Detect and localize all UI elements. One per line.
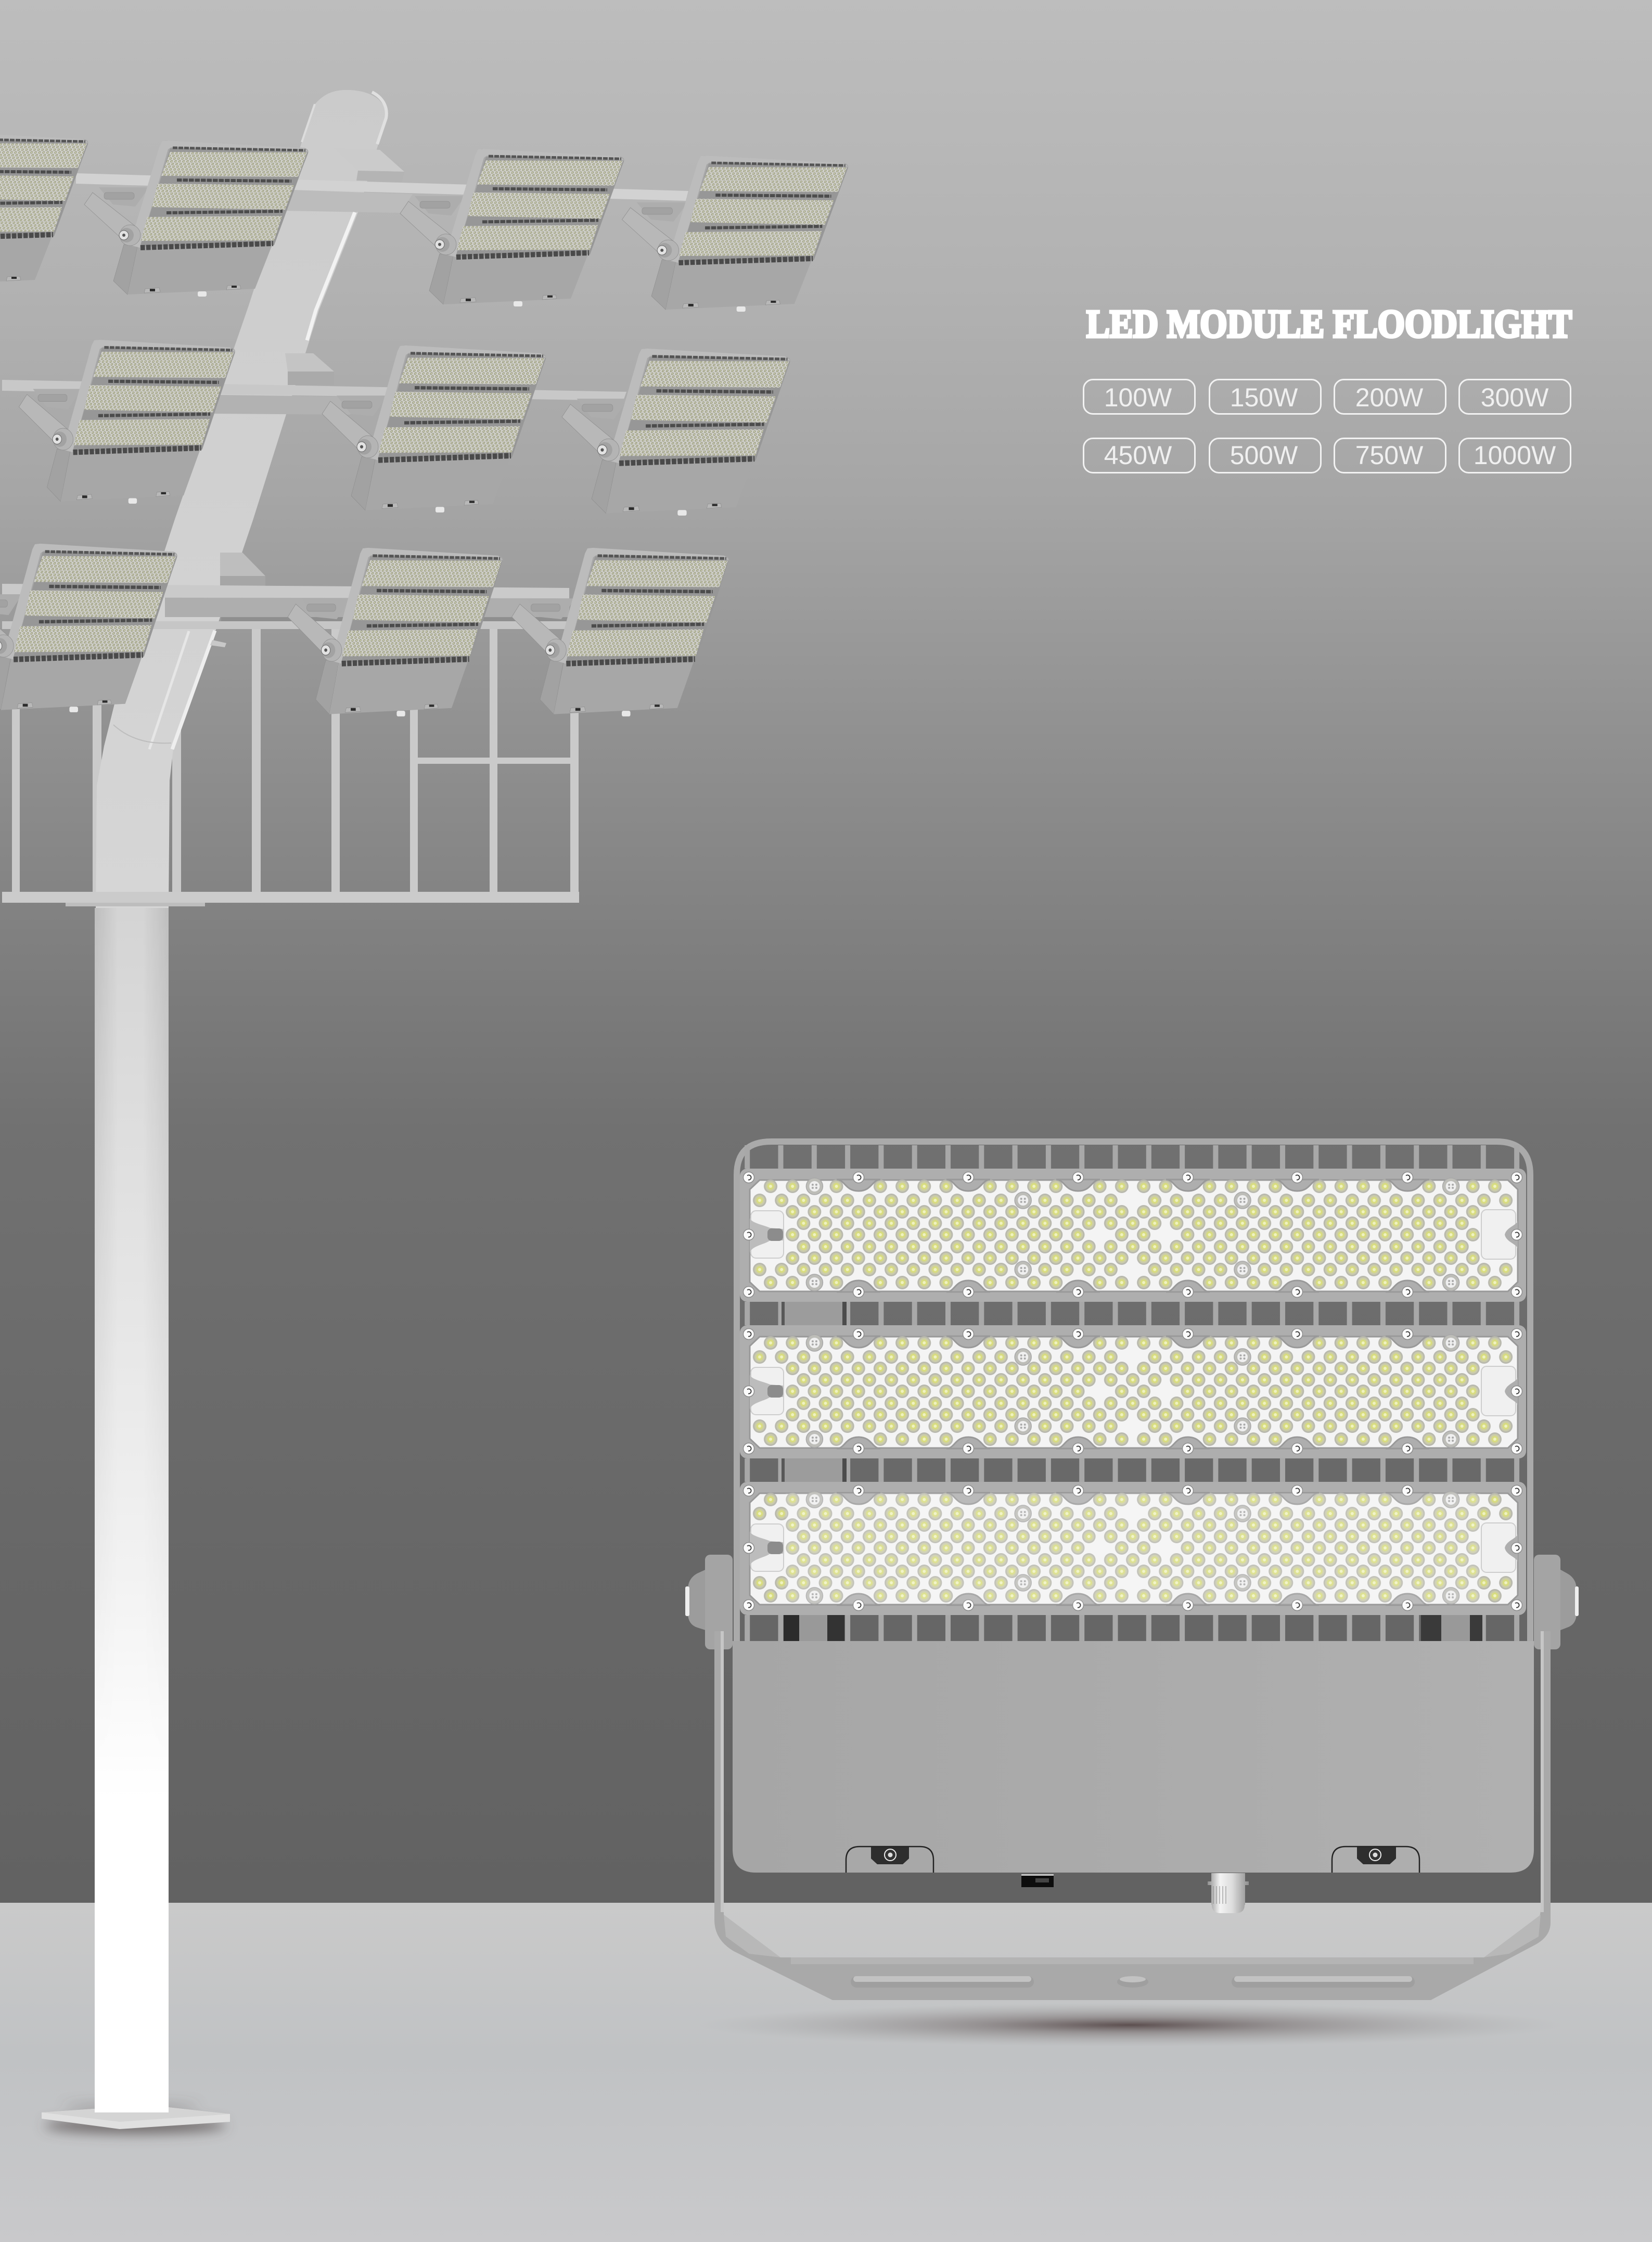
outer frame rail xyxy=(737,1142,1530,1641)
side hinge right xyxy=(1534,1555,1579,1649)
clamp block middle xyxy=(285,353,334,385)
base plate shadow xyxy=(44,2103,226,2134)
wattage 150W: 150W xyxy=(1230,383,1298,412)
base plate xyxy=(42,2107,230,2129)
small floodlight top row 3 xyxy=(622,156,848,312)
LED module bottom xyxy=(740,1482,1526,1615)
cage frame xyxy=(12,627,579,892)
floor shadow of floodlight xyxy=(698,2003,1562,2047)
fins between modules lower xyxy=(740,1458,1526,1482)
wattage 300W: 300W xyxy=(1481,383,1549,412)
wattage 750W: 750W xyxy=(1355,441,1424,470)
wattage 750W xyxy=(1334,438,1445,472)
title: LED MODULE FLOODLIGHT xyxy=(1086,302,1572,346)
small floodlight top row 1 xyxy=(84,140,309,297)
fins between modules upper xyxy=(740,1302,1526,1325)
small floodlight lower row 3 xyxy=(512,548,729,716)
small floodlight middle row 1 xyxy=(19,340,235,504)
mounting clip left xyxy=(846,1847,933,1873)
small floodlight lower row 2 xyxy=(288,548,503,716)
arm upper xyxy=(76,173,688,213)
small floodlight top row far left xyxy=(0,132,88,288)
back plate xyxy=(733,1641,1534,1873)
large floodlight xyxy=(685,1142,1579,2000)
bracket slot right xyxy=(1232,1976,1415,1988)
clamp block lower xyxy=(220,553,265,587)
clamp block upper xyxy=(356,150,404,181)
vertical pole xyxy=(95,908,169,2112)
slanted upper pole xyxy=(96,90,387,908)
floor xyxy=(0,1903,1652,2242)
top heat fins xyxy=(740,1145,1526,1169)
lighting tower on pole xyxy=(0,90,848,2134)
wattage 100W xyxy=(1083,380,1195,414)
wattage 450W: 450W xyxy=(1104,441,1172,470)
LED module middle xyxy=(740,1325,1526,1458)
small floodlight middle row 3 xyxy=(562,349,790,516)
small floodlight top row 2 xyxy=(400,149,624,306)
side hinge left xyxy=(685,1555,733,1649)
wattage 150W xyxy=(1209,380,1321,414)
U mounting bracket xyxy=(714,1631,1551,2000)
wattage 1000W xyxy=(1459,438,1570,472)
cable gland xyxy=(1208,1873,1249,1913)
wattage 1000W: 1000W xyxy=(1474,441,1556,470)
wattage 100W: 100W xyxy=(1104,383,1172,412)
black vent plug xyxy=(1021,1874,1054,1887)
mounting clip right xyxy=(1332,1847,1419,1873)
LED module top xyxy=(740,1169,1526,1302)
bottom heat fins and cable clips xyxy=(740,1615,1526,1641)
wattage options xyxy=(1083,380,1570,472)
wattage 450W xyxy=(1083,438,1195,472)
wattage 200W: 200W xyxy=(1355,383,1424,412)
arm middle xyxy=(2,380,626,415)
small floodlight lower row 1 xyxy=(0,544,177,712)
bracket slot left xyxy=(851,1976,1034,1988)
bracket center hole xyxy=(1117,1976,1148,1988)
small floodlight middle row 2 xyxy=(322,345,546,513)
wattage 500W: 500W xyxy=(1230,441,1298,470)
arm lower xyxy=(2,584,570,621)
wattage 500W xyxy=(1209,438,1321,472)
cage top and bottom bars xyxy=(2,621,579,906)
wattage 300W xyxy=(1459,380,1570,414)
wattage 200W xyxy=(1334,380,1445,414)
